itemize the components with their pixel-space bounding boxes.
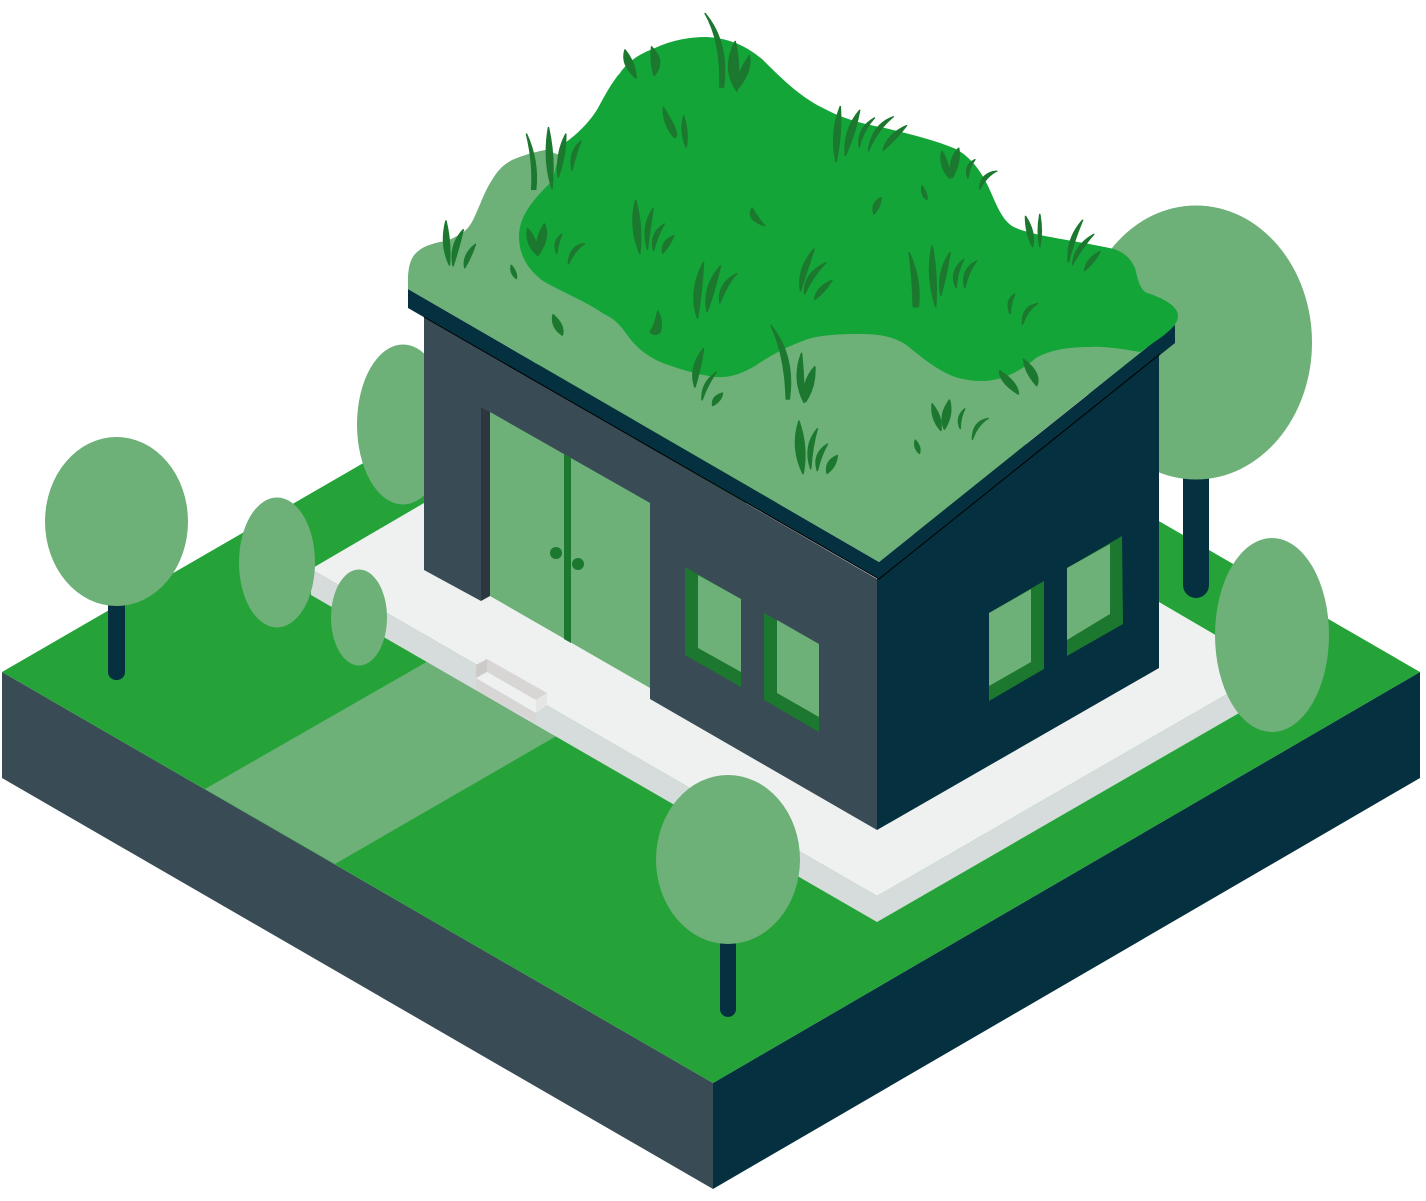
house: front wall xyxy=(424,317,877,830)
front window right xyxy=(764,613,819,732)
garden path xyxy=(205,660,560,864)
front step xyxy=(476,659,547,723)
side window right xyxy=(1067,536,1123,656)
front window left xyxy=(685,567,741,687)
tree: front xyxy=(656,775,800,1017)
roof: dark grass mound xyxy=(519,37,1178,381)
roof rim xyxy=(408,289,1175,579)
concrete plinth xyxy=(311,503,1272,922)
tree: behind house left xyxy=(357,344,449,504)
side window left xyxy=(989,581,1044,701)
ground base xyxy=(2,262,1420,1189)
door jamb xyxy=(481,407,490,601)
house: side wall xyxy=(877,353,1159,830)
shrub: left xyxy=(239,498,315,628)
roof: light grass xyxy=(408,150,1172,562)
tree: far left xyxy=(45,437,188,680)
tree: back right xyxy=(1080,206,1312,598)
double door xyxy=(490,412,650,688)
shrub: right xyxy=(1215,538,1329,732)
grass blades xyxy=(444,13,1100,474)
shrub: small left xyxy=(331,570,387,666)
